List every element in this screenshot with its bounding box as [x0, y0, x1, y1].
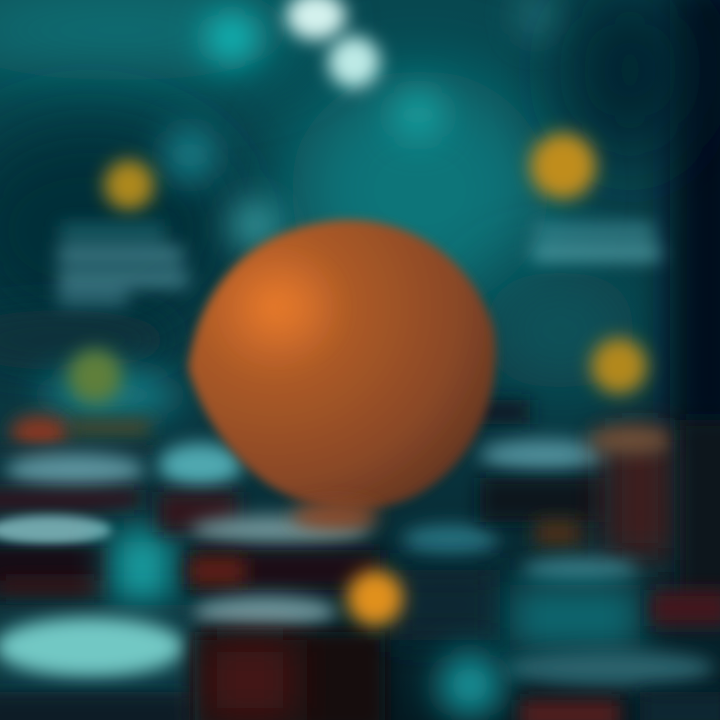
icon: top left yellow circle	[104, 160, 154, 210]
text block: left blurred label	[58, 225, 188, 304]
light spots at top	[166, 0, 549, 249]
lower left stacked discs	[0, 370, 210, 720]
background lighting	[0, 0, 720, 440]
lower centre stacked discs	[158, 443, 500, 720]
lower right stacked discs	[438, 400, 720, 720]
icon: bottom orange glowing circle	[347, 570, 403, 626]
icon: middle right yellow circle	[591, 338, 647, 394]
icon: top right yellow circle	[530, 133, 596, 199]
text block: right blurred label	[532, 225, 660, 260]
icon: middle left olive circle	[68, 349, 122, 403]
central orange sphere	[188, 220, 496, 529]
